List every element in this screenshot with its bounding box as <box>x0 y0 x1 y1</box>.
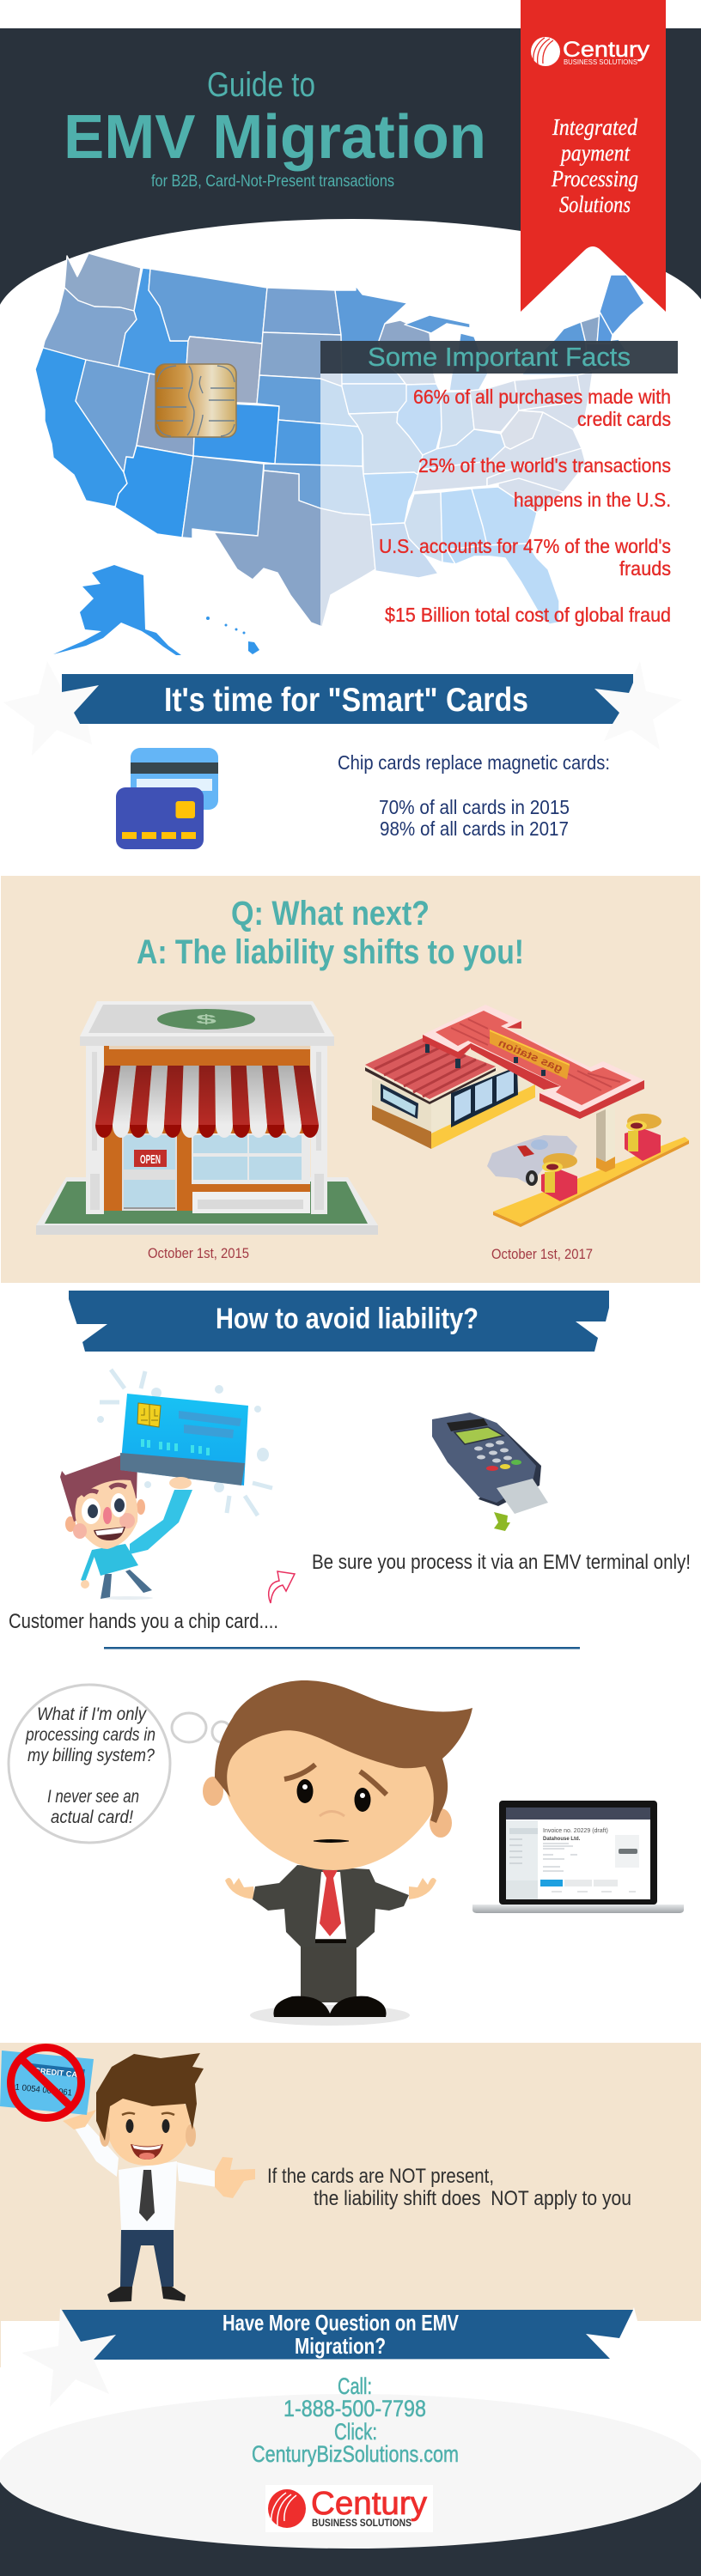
state: Alaska <box>53 565 181 655</box>
illustration: puzzled businessman <box>203 1680 472 2026</box>
ribbon tagline: Solutions <box>559 191 631 217</box>
text: customer hands card: Customer hands you a chip card.... <box>9 1610 278 1633</box>
contact details: Click: <box>334 2419 377 2445</box>
state: Alabama <box>441 489 487 564</box>
state: Arkansas <box>363 472 421 525</box>
heading: what next <box>137 895 524 971</box>
open sign <box>134 1150 167 1167</box>
facts text block <box>379 386 671 626</box>
smart cards text: 98% of all cards in 2017 <box>380 817 569 840</box>
state: Michigan lower <box>449 333 488 391</box>
illustration: store <box>36 1001 378 1235</box>
state: Arizona <box>115 446 193 538</box>
banner: more questions: Migration? <box>295 2333 386 2359</box>
banner: smart cards: It's time for "Smart" Cards <box>164 682 528 719</box>
state: Southern New England <box>586 339 627 371</box>
fuel pump front <box>541 1153 577 1201</box>
state: West Virginia <box>501 410 543 449</box>
shirt and arms <box>63 2110 255 2230</box>
contact details <box>252 2373 459 2467</box>
illustration: gas station <box>365 1005 689 1227</box>
crossed credit card: 01 0054 00 0061 <box>10 2082 73 2099</box>
contact details: 1-888-500-7798 <box>283 2396 426 2421</box>
logo: Century Business Solutions white: BUSINESS SOLUTIONS <box>564 58 637 66</box>
state: Washington <box>64 253 141 311</box>
state: Nebraska <box>257 375 360 427</box>
state: Wyoming <box>183 337 262 404</box>
decorative stars: footer <box>21 2307 653 2407</box>
US map with states <box>35 253 644 655</box>
header background <box>0 28 701 422</box>
state: Michigan upper <box>405 315 470 333</box>
bubble text: processing cards in <box>25 1725 155 1745</box>
state: Iowa <box>342 384 415 414</box>
ribbon tagline <box>551 114 638 217</box>
translucent facts overlay <box>320 374 701 631</box>
banner: how to avoid liability <box>69 1291 609 1352</box>
contact details: Call: <box>338 2373 372 2399</box>
state: Utah <box>137 374 196 456</box>
door <box>122 1133 177 1211</box>
date labels <box>148 1245 593 1262</box>
state: New Mexico <box>182 456 264 538</box>
facts text block: happens in the U.S. <box>514 489 671 511</box>
state: South Dakota <box>259 332 344 386</box>
crossed credit card <box>0 2047 94 2117</box>
logo: Century Business Solutions white <box>531 37 650 66</box>
awning <box>95 1066 319 1138</box>
state: Indiana <box>438 391 474 449</box>
state: Tennessee <box>413 461 507 492</box>
state: New Jersey and Delaware <box>519 371 593 429</box>
station building <box>365 1038 535 1149</box>
ribbon tagline: Integrated <box>552 114 637 140</box>
logo: Century Business Solutions white: Century <box>563 38 650 62</box>
state: Louisiana <box>371 523 438 578</box>
banner: more questions <box>62 2310 633 2360</box>
text: not present: If the cards are NOT present, <box>267 2165 494 2188</box>
illustration: laptop with billing system: Datahouse Ltd. <box>543 1837 581 1842</box>
state: Missouri <box>349 412 423 478</box>
banner: how to avoid liability: How to avoid liability? <box>216 1303 479 1335</box>
keypad <box>474 1441 512 1463</box>
logo: Century Business Solutions colour <box>265 2485 433 2532</box>
state: Idaho <box>119 268 188 380</box>
decorative stars: smart cards <box>3 661 682 756</box>
facts heading bar: Some Important Facts <box>368 342 631 372</box>
gas station sign: gas station <box>497 1036 564 1074</box>
smart cards text <box>338 751 610 840</box>
state: Oregon <box>43 288 137 367</box>
facts text block: frauds <box>619 557 671 580</box>
smart cards text: 70% of all cards in 2015 <box>379 796 570 818</box>
crossed credit card: CREDIT CA <box>34 2066 78 2079</box>
state: Oklahoma <box>264 464 370 515</box>
heading: what next: A: The liability shifts to you! <box>137 933 524 971</box>
illustration: man with crossed-out card <box>0 2047 255 2302</box>
title: EMV Migration <box>64 103 486 172</box>
state: Kansas <box>275 420 363 466</box>
panel: not present <box>0 2043 701 2367</box>
illustration: laptop with billing system: Invoice no. 20229 (draft) <box>543 1828 608 1834</box>
smart cards text: Chip cards replace magnetic cards: <box>338 751 610 774</box>
head <box>203 1680 472 1870</box>
state: Mississippi <box>405 492 442 562</box>
heading: what next: Q: What next? <box>231 895 430 933</box>
date labels: October 1st, 2015 <box>148 1245 249 1261</box>
state: Vermont <box>581 316 600 343</box>
logo: Century Business Solutions colour: BUSINESS SOLUTIONS <box>312 2517 411 2529</box>
state: New Hampshire <box>597 312 613 343</box>
bubble text: actual card! <box>51 1807 133 1827</box>
face <box>96 2053 204 2166</box>
state: New York <box>521 322 593 375</box>
state: Hawaii <box>248 641 259 654</box>
legs and shoes <box>107 2230 186 2302</box>
state: Nevada <box>76 360 149 472</box>
state: Colorado <box>193 402 279 464</box>
footer background <box>0 2394 701 2576</box>
facts heading bar <box>320 341 678 374</box>
canopy <box>423 1005 644 1119</box>
illustration: store: $ <box>196 1012 218 1027</box>
state: Minnesota <box>335 286 407 384</box>
state: Florida <box>447 544 559 624</box>
facts text block: $15 Billion total cost of global fraud <box>385 604 671 626</box>
pillar <box>596 1105 615 1172</box>
state: Georgia <box>472 487 537 545</box>
bubble text <box>25 1704 155 1827</box>
text: not present <box>267 2165 631 2210</box>
state: Wisconsin <box>379 320 436 385</box>
state: Ohio <box>470 380 519 432</box>
boy <box>60 1394 248 1600</box>
icon: credit cards <box>116 748 218 849</box>
car <box>487 1135 577 1186</box>
state: North Dakota <box>263 288 341 335</box>
facts text block: 66% of all purchases made with <box>413 386 671 408</box>
facts text block: U.S. accounts for 47% of the world's <box>379 535 671 557</box>
state: Texas <box>214 471 375 627</box>
state: Pennsylvania <box>515 375 582 410</box>
title: for B2B, Card-Not-Present transactions <box>151 173 394 191</box>
lower panel <box>192 1192 310 1213</box>
icon: EMV chip <box>155 364 236 437</box>
state: North Carolina <box>487 448 586 492</box>
bubble text: I never see an <box>47 1787 139 1807</box>
state: Montana <box>149 269 267 343</box>
bubble text: my billing system? <box>27 1746 155 1765</box>
facts text block: credit cards <box>577 408 671 430</box>
illustration: laptop with billing system <box>472 1801 684 1913</box>
banner: more questions: Have More Question on EMV <box>222 2310 460 2336</box>
logo: Century Business Solutions colour: Century <box>311 2486 427 2522</box>
state: South Carolina <box>498 478 564 513</box>
red ribbon <box>521 0 666 312</box>
held credit card <box>120 1394 248 1485</box>
state: Maine <box>600 275 644 335</box>
state: Kentucky <box>419 429 505 470</box>
date labels: October 1st, 2017 <box>491 1246 593 1262</box>
bubble text: What if I'm only <box>37 1704 147 1724</box>
contact details: CenturyBizSolutions.com <box>252 2441 459 2467</box>
arrow: curved pink <box>269 1571 295 1603</box>
ribbon tagline: payment <box>559 140 631 166</box>
text: not present: the liability shift does NOT apply to you <box>314 2187 631 2210</box>
thought bubble <box>9 1685 231 1843</box>
title: Guide to <box>207 66 315 104</box>
illustration: EMV terminal <box>432 1413 548 1531</box>
panel: what next <box>1 876 700 1283</box>
shop window <box>192 1133 310 1184</box>
fuel pump rear <box>625 1114 661 1161</box>
title <box>64 66 486 191</box>
rays and dots <box>97 1370 272 1516</box>
open sign: OPEN <box>140 1152 161 1167</box>
ribbon tagline: Processing <box>551 166 638 191</box>
gas station sign <box>490 1030 570 1079</box>
state: Illinois <box>397 384 442 455</box>
banner: smart cards <box>62 674 633 724</box>
terminal action keys <box>486 1460 521 1471</box>
state: California <box>35 348 127 507</box>
island <box>493 1137 689 1227</box>
facts text block: 25% of the world's transactions <box>418 454 671 477</box>
illustration: customer with chip card <box>60 1370 272 1600</box>
state: Virginia <box>490 412 582 471</box>
suit <box>225 1865 436 1947</box>
small Hawaiian islands <box>206 617 246 634</box>
